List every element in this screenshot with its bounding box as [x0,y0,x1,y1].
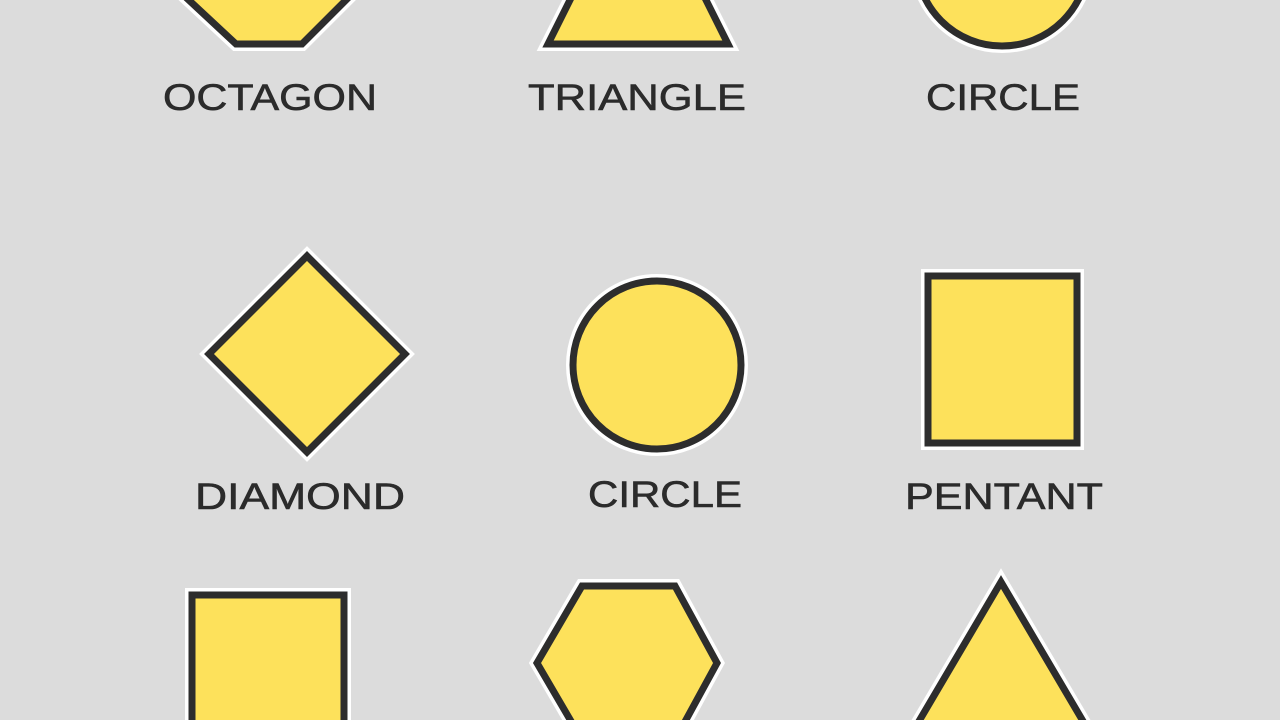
shape: circle (top) [916,0,1088,46]
shape: hexagon (bottom) [537,586,717,720]
shape: square (pentant) [928,276,1077,443]
label: circle (middle): CIRCLE [588,474,742,515]
label: circle (top): CIRCLE [926,77,1080,118]
label: diamond: DIAMOND [195,476,405,517]
shape: square (bottom) [192,595,344,720]
label: octagon: OCTAGON [163,77,377,118]
shape: circle (middle) [573,281,741,449]
label: pentant: PENTANT [905,476,1103,517]
shape: octagon (top) [178,0,356,44]
shape: triangle (bottom) [902,582,1100,720]
shape: triangle (top) [548,0,728,44]
shape: diamond [209,256,405,452]
label: triangle: TRIANGLE [528,77,746,118]
